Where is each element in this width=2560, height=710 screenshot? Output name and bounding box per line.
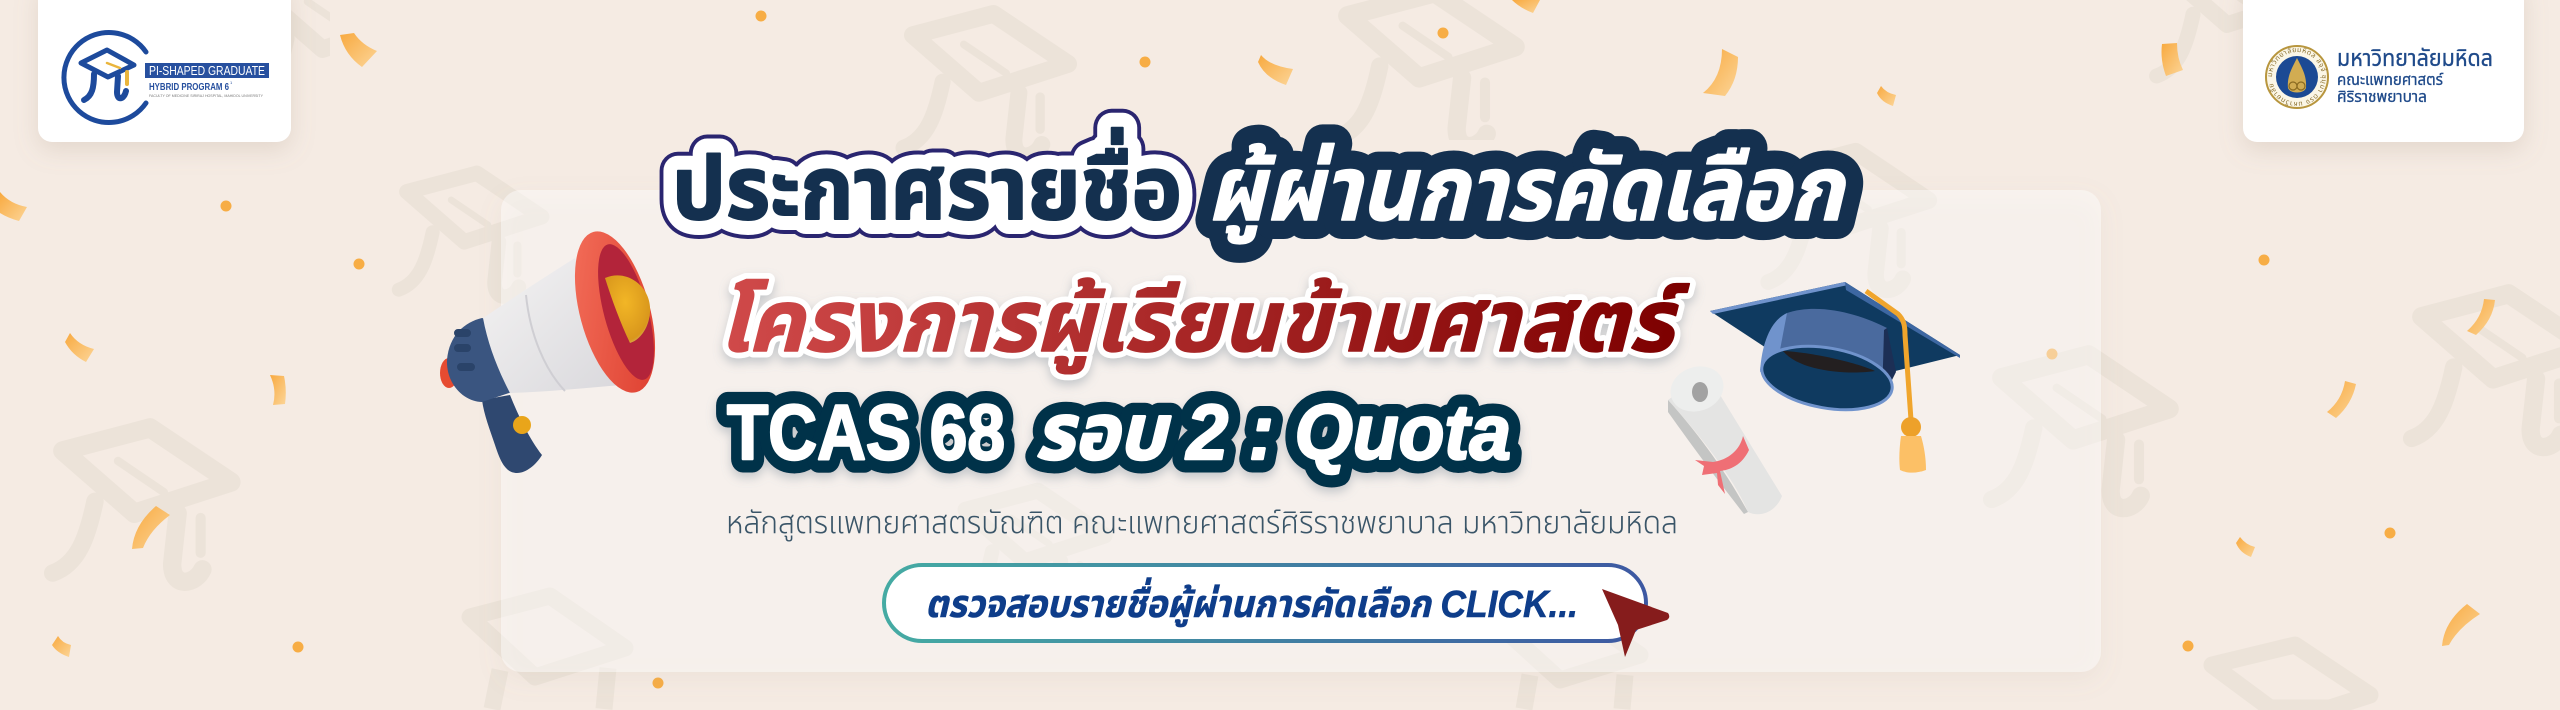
university name: ศิริราชพยาบาล [2337,89,2427,106]
icon: cursor arrow [1602,589,1669,657]
title: white pill part: ประกาศรายชื่อ [672,127,1182,238]
icon: university seal: มหาวิทยาลัยมหิดล สจฺจํ ชุมฺมา ตรง มหาวิทยาลัย [2268,48,2327,106]
logo wordmark bar: 1 [230,80,233,85]
title: navy part: ผู้ผ่านการคัดเลือก [1207,140,1847,244]
panel: left logo card [38,0,291,142]
heading: project name: โครงการผู้เรียนข้ามศาสตร์ [718,274,1690,374]
button: ตรวจสอบรายชื่อผู้ผ่านการคัดเลือก CLICK... [925,577,1578,628]
icon: megaphone [440,223,670,473]
title: white pill part: ประกาศรายชื่อ [672,127,1182,238]
title: white pill part: ประกาศรายชื่อ [672,127,1182,238]
heading: project name: โครงการผู้เรียนข้ามศาสตร์ [718,274,1690,374]
heading: TCAS round: TCAS 68 [727,388,1005,476]
title: navy part: ผู้ผ่านการคัดเลือก [1207,140,1847,244]
icon: graduation cap [1710,282,1960,473]
button [884,565,1646,641]
university name [2337,45,2493,106]
panel: right logo card [2239,0,2528,154]
logo wordmark bar: FACULTY OF MEDICINE SIRIRAJ HOSPITAL, MAHIDOL UNIVERSITY [149,94,264,98]
icon: pi-shaped graduate logo [64,33,146,123]
logo wordmark bar: PI-SHAPED GRADUATE [149,64,265,78]
university name: คณะแพทยศาสตร์ [2337,72,2444,89]
logo wordmark bar [145,63,269,98]
heading: TCAS round: รอบ 2 : Quota [1035,388,1511,476]
icon: diploma scroll [1664,359,1782,514]
university name: มหาวิทยาลัยมหิดล [2337,45,2493,71]
heading: TCAS round: TCAS 68 [727,388,1005,476]
logo wordmark bar: HYBRID PROGRAM 6 [149,82,229,93]
heading: TCAS round: รอบ 2 : Quota [1035,388,1511,476]
panel: central card [501,190,2101,672]
heading: TCAS round [727,388,1511,476]
subtitle: หลักสูตรแพทยศาสตรบัณฑิต คณะแพทยศาสตร์ศิริราชพยาบาล มหาวิทยาลัยมหิดล [726,505,1678,542]
